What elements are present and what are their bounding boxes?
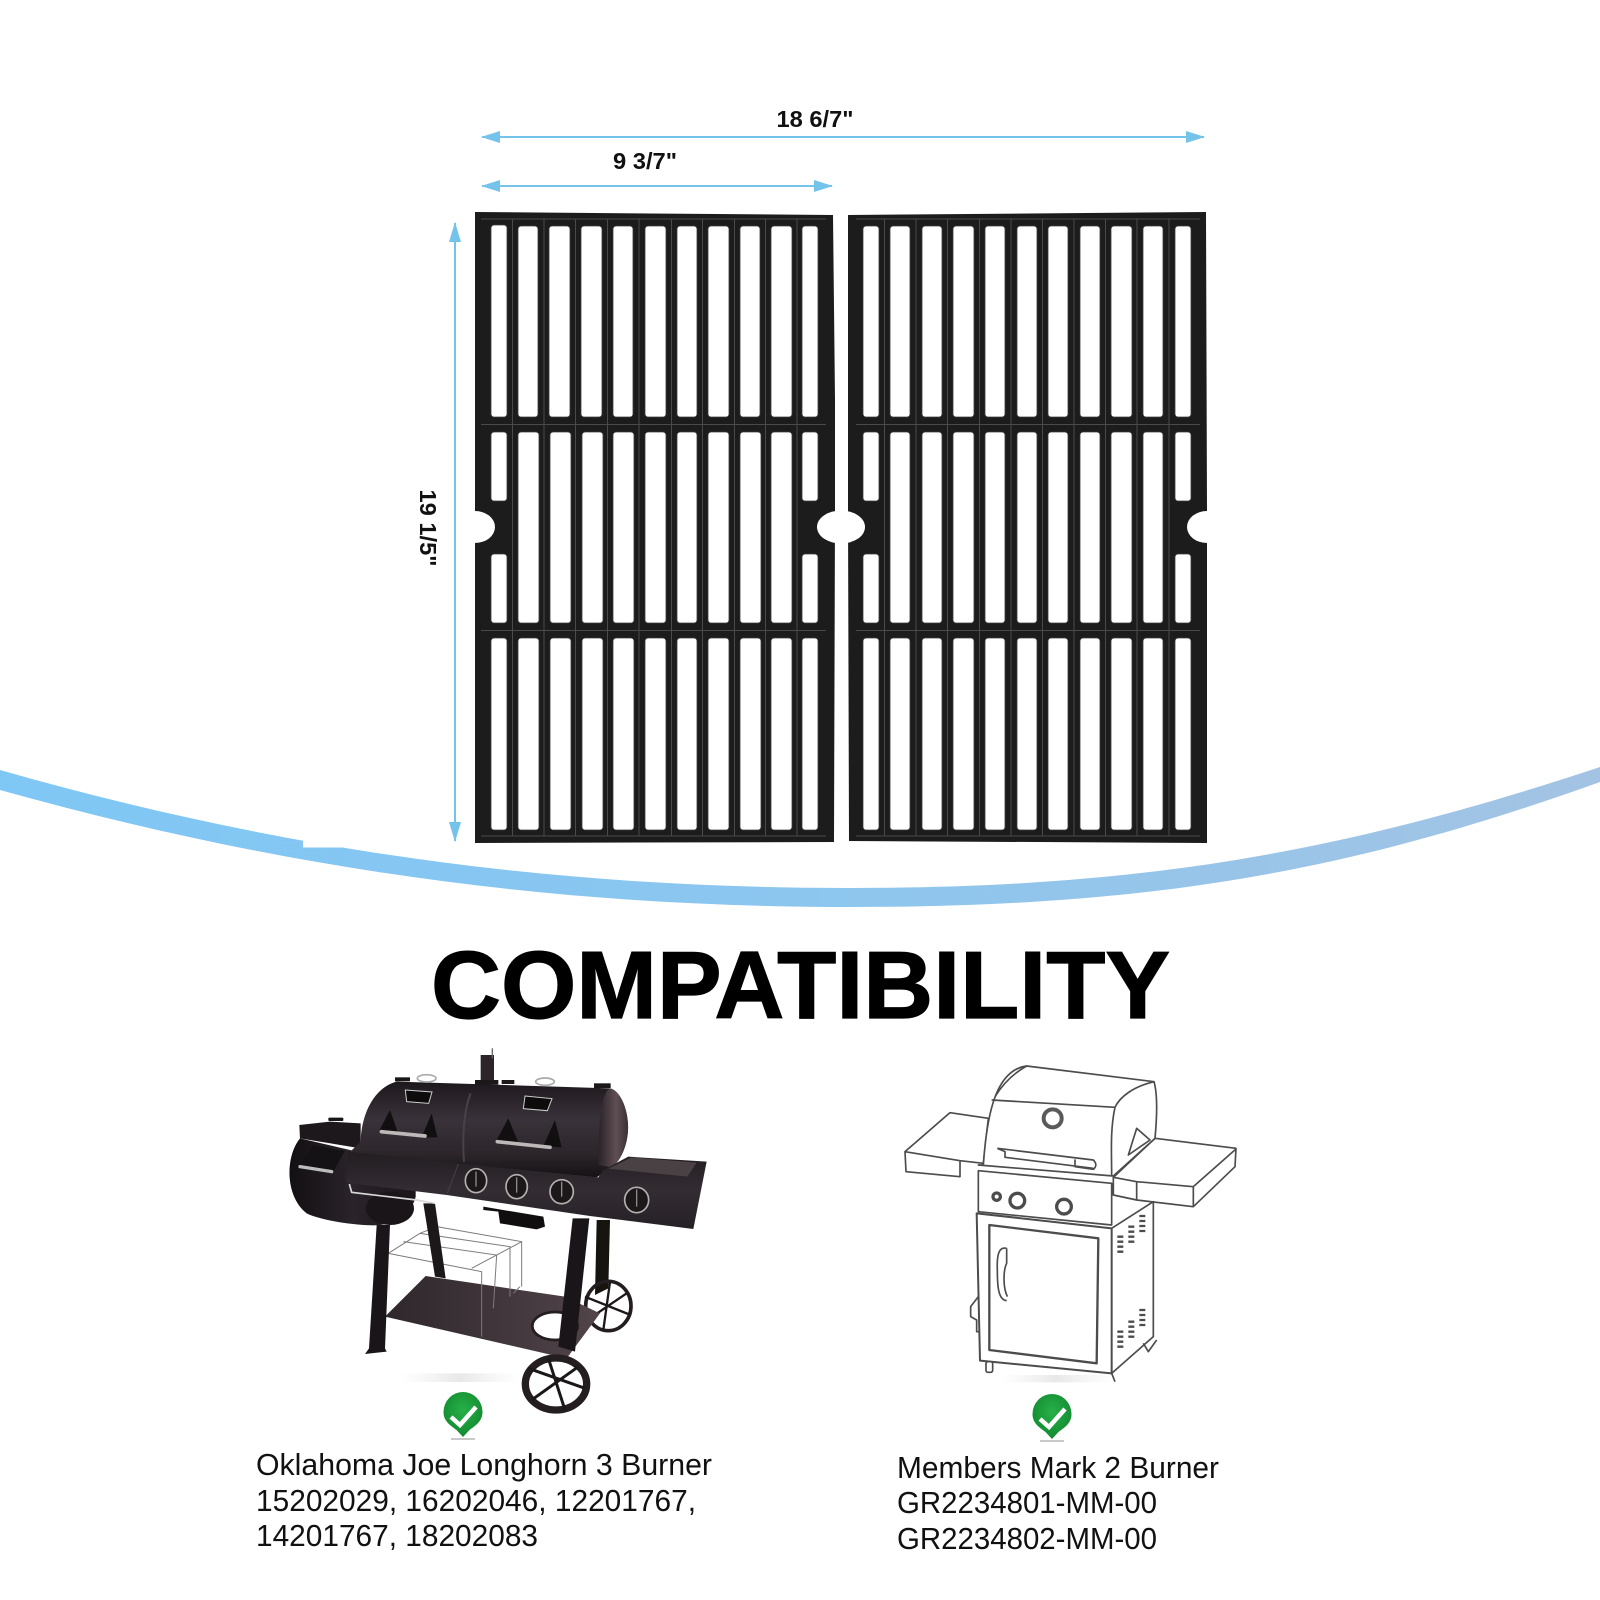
- product image: black offset smoker grill: [289, 1048, 707, 1410]
- firebox lid: [978, 1066, 1157, 1176]
- curved blue band: [0, 767, 1600, 907]
- check badge: right product: [1032, 1394, 1072, 1442]
- left side shelf: [905, 1113, 988, 1177]
- dimension: overall width 18 6/7: [481, 106, 1205, 143]
- right cooking grate: [848, 212, 1207, 843]
- caption: right product models: GR2234801-MM-00: [897, 1485, 1157, 1520]
- product image: line drawing of 2 burner gas grill: [905, 1066, 1236, 1382]
- center hole between grates: [817, 510, 865, 544]
- dimension: overall width 18 6/7: 18 6/7": [776, 106, 854, 132]
- check badge: left product: [444, 1392, 482, 1440]
- caption: right product models: GR2234802-MM-00: [897, 1521, 1157, 1556]
- dimension: single grate width 9 3/7: [481, 148, 833, 192]
- caption: right product models: Members Mark 2 Burner: [897, 1450, 1219, 1485]
- caption: right product models: [897, 1450, 1219, 1556]
- caption: left product models: [256, 1447, 712, 1553]
- dimension: depth 19 1/5: [415, 222, 461, 842]
- dimension: single grate width 9 3/7: 9 3/7": [613, 148, 677, 174]
- right side shelf: [1113, 1138, 1236, 1207]
- control panel and cabinet: [978, 1171, 1112, 1225]
- caption: left product models: Oklahoma Joe Longhorn 3 Burner: [256, 1447, 712, 1482]
- caption: left product models: 14201767, 18202083: [256, 1518, 538, 1553]
- left cooking grate: [475, 212, 835, 843]
- caption: left product models: 15202029, 16202046, 12201767,: [256, 1483, 696, 1518]
- title: COMPATIBILITY: [431, 932, 1170, 1039]
- dimension: depth 19 1/5: 19 1/5": [415, 490, 441, 566]
